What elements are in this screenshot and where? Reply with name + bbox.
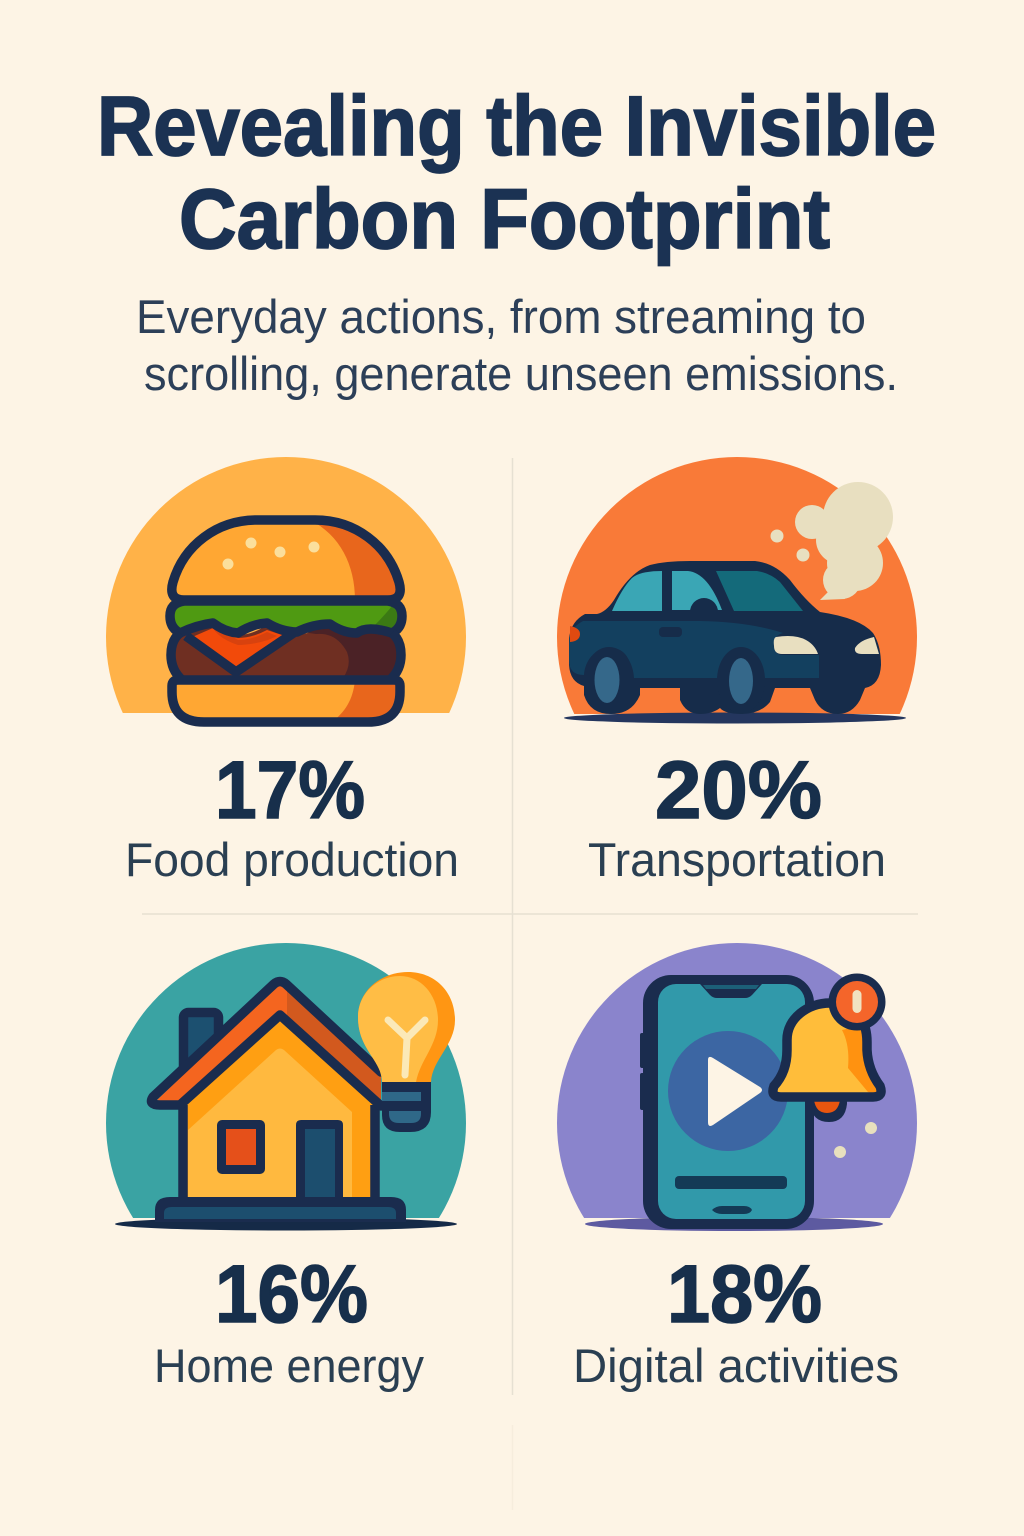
panel: digital activities — [557, 943, 917, 1392]
icon: burger — [170, 520, 404, 722]
background circle: home — [106, 943, 466, 1218]
ground shadow: home — [115, 1218, 457, 1230]
icon: exhaust smoke — [770, 482, 893, 600]
icon: house — [152, 982, 406, 1222]
label: home energy: Home energy — [154, 1339, 424, 1392]
subtitle: scrolling, generate unseen emissions. — [144, 347, 898, 400]
panel: transportation — [557, 457, 917, 886]
stat: 16%: 16% — [215, 1249, 368, 1340]
background circle: digital — [557, 943, 917, 1218]
ground shadow: car — [564, 712, 906, 724]
ground shadow: phone — [585, 1217, 883, 1231]
decorative sparks — [834, 1122, 877, 1158]
label: digital activities: Digital activities — [573, 1339, 899, 1392]
background semicircle: food — [106, 457, 466, 713]
title: Carbon Footprint — [179, 172, 830, 266]
stat: 18%: 18% — [667, 1249, 822, 1340]
stat: 17%: 17% — [215, 745, 365, 836]
label: transportation: Transportation — [588, 833, 886, 886]
panel: home energy — [106, 943, 466, 1392]
title — [97, 79, 936, 266]
icon: phone — [640, 975, 814, 1229]
stat: 20%: 20% — [655, 745, 822, 836]
icon: notification bell — [773, 974, 890, 1122]
icon: light bulb — [358, 972, 455, 1132]
infographic canvas — [101, 92, 934, 1395]
subtitle: Everyday actions, from streaming to — [136, 290, 866, 343]
subtitle — [136, 290, 898, 400]
panel: food production — [106, 457, 466, 886]
label: food production: Food production — [125, 833, 459, 886]
title: Revealing the Invisible — [97, 79, 936, 173]
icon: car — [569, 561, 881, 714]
background semicircle: transportation — [557, 457, 917, 714]
